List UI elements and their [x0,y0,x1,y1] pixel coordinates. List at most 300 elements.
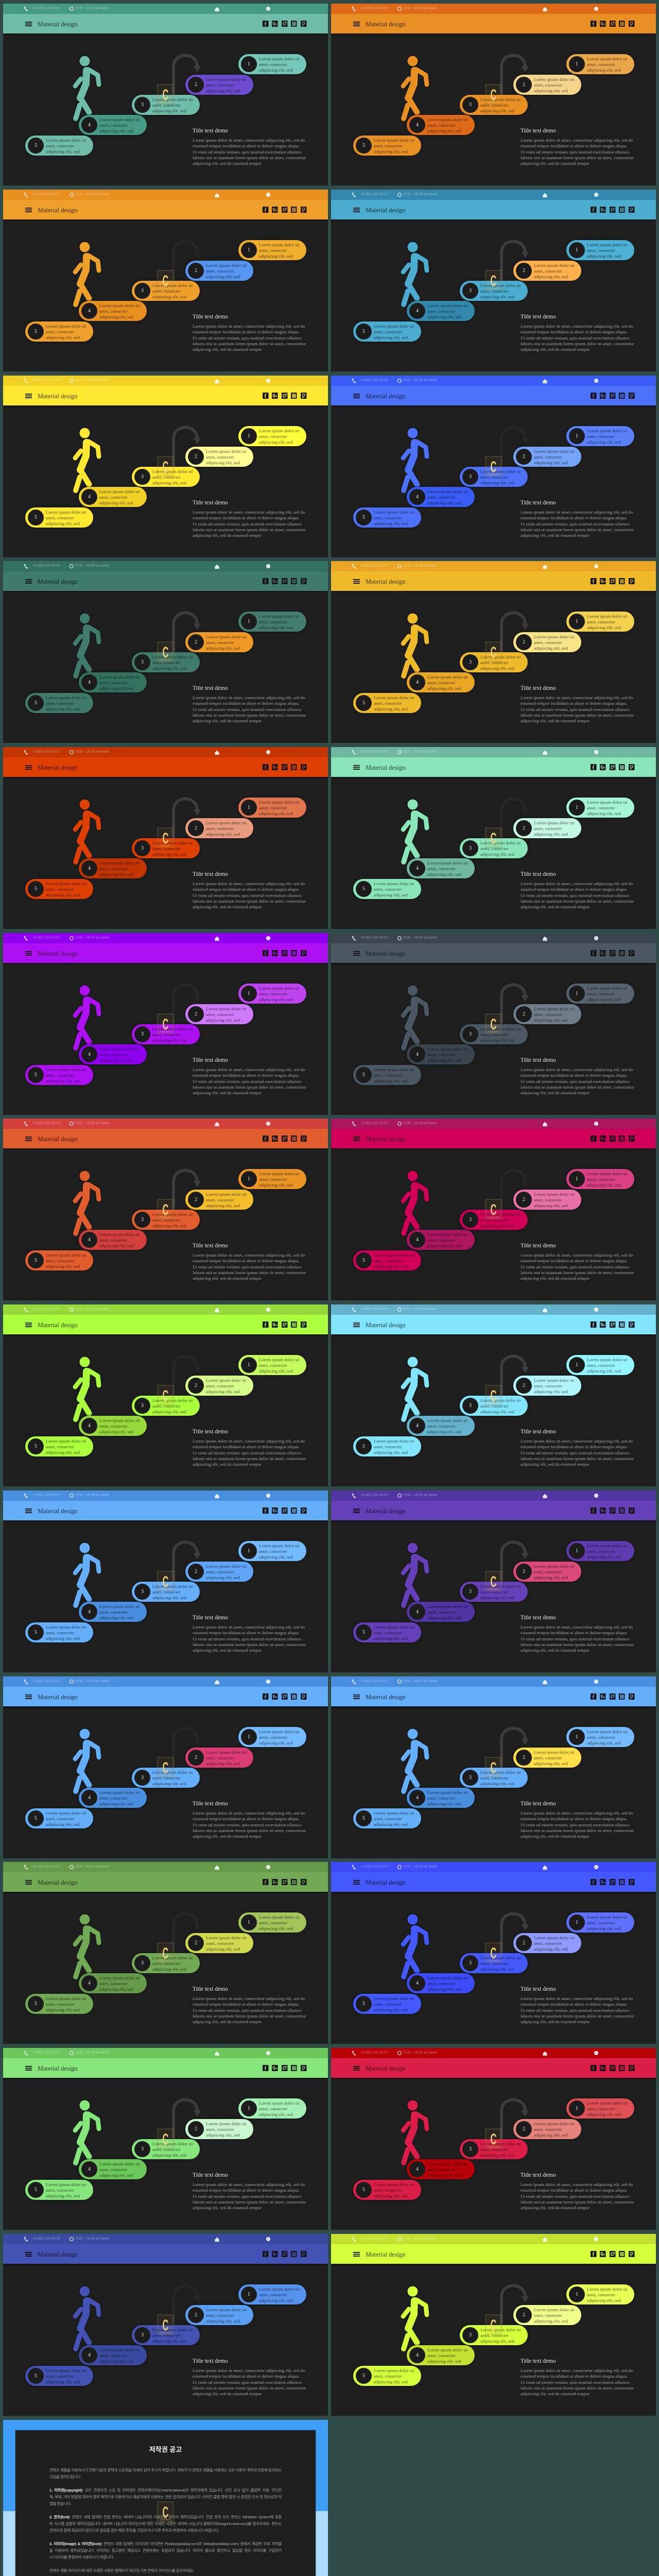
top bar: +0 800 123 45 67 [360,2237,389,2241]
step 3: 3 [469,1031,472,1037]
watermark [157,1571,174,1591]
watermark: CONTENTS [160,1216,171,1218]
step 4: 4 [416,680,419,685]
text block [193,324,306,352]
step 1: Lorem ipsum dolor sit [587,800,627,805]
heading: Title text demo [193,1243,228,1249]
step 2 [513,1933,581,1953]
top bar: 9:00 - 19:00 all week [404,2237,437,2241]
step 1 [238,240,306,260]
step 1: amet, consecter [259,434,287,439]
text block: Lorem ipsum dolor sit amet, consectetur adipiscing elit, sed do [193,1067,305,1072]
watermark: C [491,459,496,476]
step 2: amet, consecter [206,1941,234,1946]
text block [193,1067,306,1096]
step 1 [566,1169,634,1189]
step 4: 4 [416,1237,419,1243]
text block: Ut enim ad minim veniam, quis nostrud exercitation ullamco [193,892,302,897]
arrow [170,238,206,284]
header bar [3,14,328,33]
step 1: 1 [248,1548,250,1554]
step 4: Lorem ipsum dolor sit [427,1046,467,1052]
panel: tile 12 slate [331,933,656,1115]
step 3: 3 [141,2146,144,2152]
panel: copyright notice [3,2420,328,2576]
step 3 [460,1210,528,1230]
header bar [3,943,328,963]
arrow [498,2282,534,2328]
step 4: Lorem ipsum dolor sit [427,1418,467,1423]
watermark: C [163,1945,168,1962]
step 3 [460,2325,528,2345]
watermark: CONTENTS [160,1588,171,1590]
step 4 [79,487,147,507]
step 3: 3 [141,474,144,480]
step 5: adipiscing elit, sed [46,521,80,526]
header bar [331,571,656,591]
text block: Ut enim ad minim veniam, quis nostrud exercitation ullamco [193,1079,302,1084]
watermark: CONTENTS [488,1402,499,1404]
step 2: adipiscing elit, sed [206,646,240,651]
step 4: Lorem ipsum dolor sit [99,1975,140,1980]
step 3: Lorem ipsum dolor sit [480,1026,521,1031]
step 1: amet, consecter [259,805,287,810]
header bar: Material design [366,578,405,585]
step 1: adipiscing elit, sed [587,997,621,1002]
step 1 [238,798,306,818]
step 2: Lorem ipsum dolor sit [206,1750,246,1755]
step 1: adipiscing elit, sed [259,67,293,73]
step 5: adipiscing elit, sed [374,2379,408,2384]
top bar [331,1862,656,1872]
step 5: Lorem ipsum dolor sit [46,2368,86,2373]
step 1: amet, consecter [259,1177,287,1182]
step 5 [353,1250,421,1270]
top bar: +0 800 123 45 67 [360,1865,389,1869]
icon: walking person [400,2284,431,2351]
step 5: amet, consecter [374,329,402,334]
step 2: Lorem ipsum dolor sit [534,820,574,825]
top bar: +0 800 123 45 67 [360,1494,389,1497]
text block: Lorem ipsum dolor sit amet, consectetur adipiscing elit, sed do [193,138,305,143]
step 5: Lorem ipsum dolor sit [374,1252,414,1258]
step 5: adipiscing elit, sed [374,1078,408,1083]
step 3: amet, consecter [480,2333,509,2338]
step 5: Lorem ipsum dolor sit [374,1996,414,2001]
step 5: amet, consecter [46,1258,74,1263]
step 4: adipiscing elit, sed [99,2359,133,2364]
step 4: amet, consecter [427,1609,456,1615]
step 1: Lorem ipsum dolor sit [587,614,627,619]
top bar: +0 800 123 45 67 [360,1122,389,1125]
step 3: amet, consecter [480,1032,509,1037]
step 4: adipiscing elit, sed [427,686,461,691]
step 2: adipiscing elit, sed [534,1018,568,1023]
step 3: adipiscing elit, sed [152,1595,186,1600]
text block [521,2368,634,2397]
text block [193,1810,306,1839]
text block: Lorem ipsum dolor sit amet, consectetur adipiscing elit, sed do [521,510,633,515]
top bar: +0 800 123 45 67 [32,379,61,382]
text block: laboris nisi ut asantium lorem ipsum dolor sit amet, consectetur [521,1084,634,1090]
step 2: adipiscing elit, sed [206,2132,240,2138]
text block: eiusmod tempor incididunt ut abore et dolore magna aliqua. [521,1630,628,1635]
step 4: amet, consecter [99,680,128,685]
top bar: 9:00 - 19:00 all week [404,1680,437,1683]
header bar: Material design [366,207,405,214]
step 1 [566,2098,634,2119]
text block: Ut enim ad minim veniam, quis nostrud exercitation ullamco [521,521,630,527]
step 4: 4 [88,2352,91,2358]
arrow [170,1724,206,1771]
step 5: 5 [362,2187,365,2193]
top bar [331,376,656,386]
step 1: Lorem ipsum dolor sit [587,1357,627,1362]
step 1: Lorem ipsum dolor sit [587,2100,627,2106]
text block: adipiscing elit, sed do eiusmod tempor [521,2205,589,2210]
text block: Lorem ipsum dolor sit amet, consectetur adipiscing elit, sed do [521,2368,633,2373]
top bar: 9:00 - 19:00 all week [76,379,109,382]
step 3: Lorem ipsum dolor sit [152,1212,193,1217]
step 5 [353,135,421,156]
step 4: 4 [88,1795,91,1801]
step 4 [407,1416,475,1436]
watermark: C [163,2317,168,2334]
arrow [170,2282,206,2328]
top bar [331,2048,656,2058]
step 3: 3 [469,1775,472,1781]
step 3: adipiscing elit, sed [480,2153,514,2158]
step 1: amet, consecter [587,2106,615,2111]
text block: laboris nisi ut asantium lorem ipsum dolor sit amet, consectetur [521,527,634,532]
icon: walking person [400,2098,431,2165]
step 4: adipiscing elit, sed [99,2173,133,2178]
step 2 [185,2119,253,2139]
step 4: adipiscing elit, sed [99,1429,133,1434]
step 1: 1 [576,1362,578,1368]
step 5: Lorem ipsum dolor sit [374,138,414,143]
step 4: amet, consecter [427,1052,456,1057]
text block: eiusmod tempor incididunt ut abore et dolore magna aliqua. [521,1258,628,1263]
step 4: 4 [88,308,91,314]
step 1 [238,2284,306,2304]
step 4: 4 [88,680,91,685]
arrow [498,1166,534,1213]
text block: laboris nisi ut asantium lorem ipsum dolor sit amet, consectetur [521,2013,634,2019]
step 1: amet, consecter [587,62,615,67]
text block: Ut enim ad minim veniam, quis nostrud exercitation ullamco [193,1450,302,1455]
step 2: adipiscing elit, sed [206,1761,240,1766]
watermark: CONTENTS [160,473,171,476]
step 5: adipiscing elit, sed [46,1264,80,1269]
step 1: Lorem ipsum dolor sit [259,428,299,433]
step 3: amet, consecter [152,1775,181,1781]
step 2: 2 [195,1755,197,1760]
step 1: adipiscing elit, sed [587,1182,621,1188]
top bar [3,1862,328,1872]
step 3: Lorem ipsum dolor sit [152,283,193,288]
icon: walking person [400,1355,431,1422]
arrow [498,795,534,841]
step 4 [79,2159,147,2179]
header bar: Material design [366,2065,405,2072]
icon: walking person [401,241,429,307]
step 2: Lorem ipsum dolor sit [206,77,246,82]
step 3: amet, consecter [152,1217,181,1223]
icon: walking person [401,427,429,493]
text block: adipiscing elit, sed do eiusmod tempor [193,2019,262,2024]
step 3: Lorem ipsum dolor sit [152,1955,193,1960]
step 5: 5 [362,1258,365,1263]
text block [521,510,634,538]
step 2: amet, consecter [206,2127,234,2132]
icon: walking person [72,427,102,493]
icon: walking person [400,1727,431,1794]
watermark: C [491,830,496,847]
step 3: Lorem ipsum dolor sit [480,840,521,845]
step 5 [25,1065,93,1085]
top bar [3,1118,328,1129]
text block [521,1252,634,1281]
step 1: Lorem ipsum dolor sit [587,1543,627,1548]
step 2: amet, consecter [534,1755,562,1760]
top bar: +0 800 123 45 67 [360,564,389,568]
top bar: +0 800 123 45 67 [32,1308,61,1311]
step 4: Lorem ipsum dolor sit [99,117,140,122]
step 2: Lorem ipsum dolor sit [206,634,246,639]
step 5 [353,693,421,713]
step 2: Lorem ipsum dolor sit [206,263,246,268]
step 3: adipiscing elit, sed [152,666,186,671]
step 1: adipiscing elit, sed [259,625,293,630]
arrow [172,426,201,467]
step 3: adipiscing elit, sed [152,1223,186,1228]
panel: tile 23 light green [3,2048,328,2230]
step 2: adipiscing elit, sed [534,1761,568,1766]
step 1: adipiscing elit, sed [259,2112,293,2117]
step 3: adipiscing elit, sed [480,1595,514,1600]
step 4: amet, consecter [99,1609,128,1615]
step 2: Lorem ipsum dolor sit [534,1192,574,1197]
step 1: amet, consecter [587,619,615,624]
step 2: adipiscing elit, sed [206,1203,240,1208]
step 4: adipiscing elit, sed [99,1801,133,1806]
step 5: amet, consecter [46,2374,74,2379]
step 2: adipiscing elit, sed [534,2318,568,2324]
heading: Title text demo [193,1801,228,1807]
text block [193,2182,306,2211]
step 4 [407,115,475,135]
watermark: C [163,2131,168,2148]
text block [521,324,634,352]
step 3: 3 [141,1403,144,1409]
watermark: CONTENTS [488,1588,499,1590]
step 5 [353,507,421,528]
step 5: 5 [362,1816,365,1821]
panel: tile 5 yellow [3,376,328,557]
text block: Ut enim ad minim veniam, quis nostrud exercitation ullamco [521,1264,630,1269]
icon: walking person [401,613,429,679]
step 1: amet, consecter [587,1549,615,1554]
step 3: amet, consecter [480,103,509,108]
watermark: C [491,1945,496,1962]
step 5: 5 [34,515,37,520]
step 4: amet, consecter [427,2353,456,2358]
header bar: Material design [366,950,405,957]
step 5 [25,2180,93,2200]
top bar: 9:00 - 19:00 all week [404,7,437,10]
panel: tile 10 mint [331,747,656,929]
heading: Title text demo [193,500,228,506]
step 5: 5 [362,143,365,148]
step 5: Lorem ipsum dolor sit [46,138,86,143]
top bar: 9:00 - 19:00 all week [404,750,437,754]
step 1: Lorem ipsum dolor sit [587,1729,627,1734]
step 5: 5 [34,886,37,892]
step 1 [566,1912,634,1933]
text block: adipiscing elit, sed do eiusmod tempor [193,533,262,538]
text block: Ut enim ad minim veniam, quis nostrud exercitation ullamco [193,1636,302,1641]
text block: Ut enim ad minim veniam, quis nostrud exercitation ullamco [521,1822,630,1827]
text block [521,1438,634,1467]
watermark [485,1385,502,1405]
heading: Title text demo [193,1986,228,1992]
header bar [3,1687,328,1706]
step 1: adipiscing elit, sed [259,1740,293,1745]
paragraph: copyright: 벌을 받습니다. [49,2501,71,2506]
step 1: adipiscing elit, sed [587,1368,621,1374]
step 5 [25,1250,93,1270]
step 5 [25,135,93,156]
watermark: C [163,2504,168,2521]
step 3: adipiscing elit, sed [152,1409,186,1414]
step 5: amet, consecter [46,1816,74,1821]
header bar [331,386,656,405]
step 5: Lorem ipsum dolor sit [374,1810,414,1816]
text block: Ut enim ad minim veniam, quis nostrud exercitation ullamco [521,2379,630,2384]
text block: Ut enim ad minim veniam, quis nostrud exercitation ullamco [193,2007,302,2012]
watermark: C [163,87,168,104]
step 5: 5 [362,886,365,892]
step 4: Lorem ipsum dolor sit [427,117,467,122]
step 1: 1 [576,619,578,624]
text block: laboris nisi ut asantium lorem ipsum dolor sit amet, consectetur [193,527,306,532]
panel: tile 13 coral [3,1118,328,1300]
heading: Title text demo [193,1057,228,1063]
step 3: adipiscing elit, sed [152,294,186,299]
header bar [3,2244,328,2264]
paragraph: image and icon: 3. 이미지(image) & 아이콘(icon): 콘텐츠 내에 탑재된 이미지와 아이콘은 Pixabay(pixabay.com)와 Webalys(webalys.com) 등에서 제공된 무료 저작물 [49,2541,282,2546]
panel: tile 24 red [331,2048,656,2230]
header bar: Material design [366,1321,405,1329]
step 1: 1 [248,991,250,996]
text block: adipiscing elit, sed do eiusmod tempor [193,1834,262,1839]
heading: Title text demo [193,2172,228,2178]
step 3: Lorem ipsum dolor sit [152,1584,193,1589]
step 3 [460,281,528,301]
step 2: 2 [523,639,525,645]
top bar [331,190,656,200]
step 3 [132,2325,200,2345]
watermark [157,2501,174,2522]
step 1 [566,612,634,632]
header bar: Material design [38,1879,77,1886]
top bar: +0 800 123 45 67 [360,193,389,196]
step 5: 5 [34,1816,37,1821]
step 2: Lorem ipsum dolor sit [206,1935,246,1940]
text block: Lorem ipsum dolor sit amet, consectetur adipiscing elit, sed do [521,1624,633,1630]
text block: eiusmod tempor incididunt ut abore et dolore magna aliqua. [193,1073,300,1078]
text block: eiusmod tempor incididunt ut abore et dolore magna aliqua. [193,515,300,520]
step 1: amet, consecter [259,1363,287,1368]
step 2: adipiscing elit, sed [206,2318,240,2324]
step 5: 5 [34,2001,37,2007]
heading: Title text demo [521,1057,556,1063]
panel: tile 9 red orange [3,747,328,929]
arrow [170,2096,206,2142]
watermark [485,1757,502,1777]
step 1: 1 [576,1548,578,1554]
step 5 [25,1622,93,1642]
text block: adipiscing elit, sed do eiusmod tempor [521,1090,589,1095]
step 1 [238,612,306,632]
step 1: 1 [248,1734,250,1740]
arrow [172,798,201,838]
step 4: 4 [88,1980,91,1986]
step 3: adipiscing elit, sed [152,1967,186,1972]
step 4: amet, consecter [99,866,128,871]
step 2 [513,75,581,95]
step 4 [79,115,147,135]
step 3: Lorem ipsum dolor sit [480,1770,521,1775]
step 3 [132,2139,200,2159]
step 1: Lorem ipsum dolor sit [259,2286,299,2292]
step 3 [460,95,528,115]
step 1: 1 [576,1920,578,1925]
text block: Lorem ipsum dolor sit amet, consectetur adipiscing elit, sed do [193,881,305,886]
top bar: 9:00 - 19:00 all week [404,379,437,382]
header bar: Material design [38,1136,77,1143]
panel: tile 18 purple [331,1490,656,1672]
text block: eiusmod tempor incididunt ut abore et dolore magna aliqua. [521,2374,628,2379]
step 4: adipiscing elit, sed [99,686,133,691]
step 1: amet, consecter [259,1735,287,1740]
heading: Title text demo [193,685,228,691]
step 3 [460,1396,528,1416]
step 2: 2 [523,1755,525,1760]
step 2: 2 [523,1383,525,1388]
step 4 [79,1788,147,1808]
step 3 [460,1024,528,1044]
step 1: adipiscing elit, sed [587,439,621,445]
step 3 [460,838,528,858]
step 2 [185,261,253,281]
step 1: 1 [576,61,578,67]
text block: adipiscing elit, sed do eiusmod tempor [193,1090,262,1095]
step 4: 4 [416,122,419,128]
top bar: 9:00 - 19:00 all week [76,1122,109,1125]
step 4: amet, consecter [427,123,456,128]
step 4 [79,1044,147,1064]
text block: eiusmod tempor incididunt ut abore et dolore magna aliqua. [521,887,628,892]
step 1: 1 [576,2106,578,2111]
step 5: Lorem ipsum dolor sit [46,1996,86,2001]
step 4: adipiscing elit, sed [99,1615,133,1620]
step 1: amet, consecter [587,2292,615,2297]
step 4: adipiscing elit, sed [99,1243,133,1248]
step 3: amet, consecter [480,1961,509,1966]
step 5: amet, consecter [374,701,402,706]
